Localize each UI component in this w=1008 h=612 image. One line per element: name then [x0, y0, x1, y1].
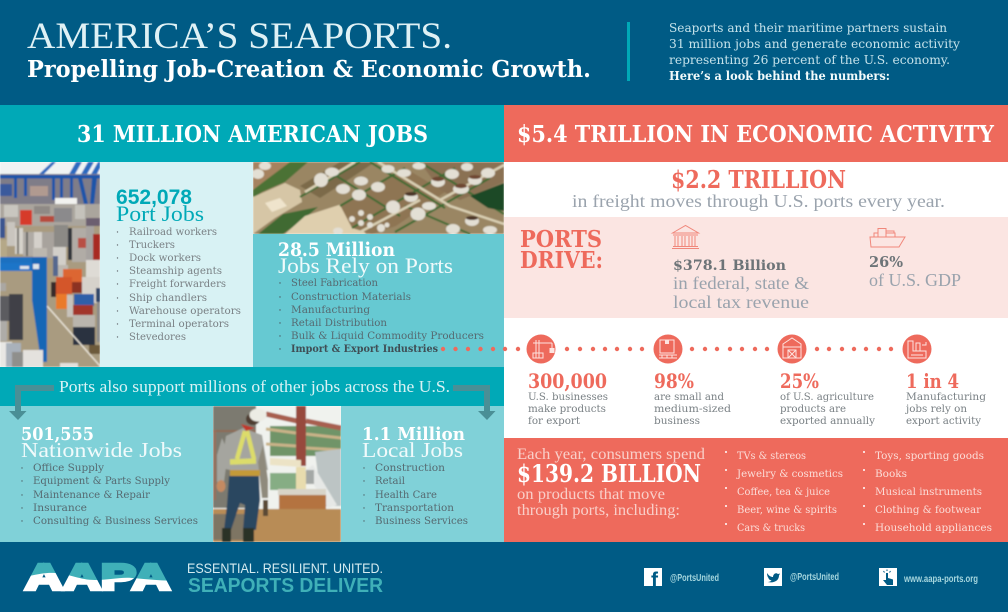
- stat: agriculture: [780, 369, 875, 427]
- list: products column two: [863, 450, 992, 534]
- spending text: [517, 446, 705, 519]
- stat: agriculture: 25%: [780, 369, 819, 393]
- list: port jobs: Ship chandlers: [129, 292, 207, 304]
- list: products column one: TVs & stereos: [737, 450, 806, 462]
- stat: businesses: [528, 369, 608, 427]
- spending text: Each year, consumers spend: [517, 446, 705, 463]
- list: industries: Retail Distribution: [291, 317, 387, 329]
- list: industries: Bulk & Liquid Commodity Producers: [291, 330, 484, 342]
- list: port jobs: Warehouse operators: [129, 305, 241, 317]
- list: products column one: Coffee, tea & juice: [737, 486, 830, 498]
- stat: tax revenue: in federal, state &: [673, 273, 809, 293]
- freight stat: $2.2 TRILLION: [671, 165, 846, 194]
- list: industries: Construction Materials: [291, 291, 411, 303]
- stat: manufacturing: Manufacturing: [906, 391, 986, 403]
- list: nationwide jobs: Office Supply: [33, 462, 104, 474]
- photo: construction worker: [213, 406, 341, 542]
- stat: small business: are small and: [654, 391, 724, 403]
- list: industries: Manufacturing: [291, 304, 370, 316]
- list: port jobs: Steamship agents: [129, 265, 222, 277]
- stat: small business: [654, 369, 731, 427]
- icon: facebook: [644, 568, 662, 592]
- arrow: left: [9, 385, 54, 420]
- list: products column one: Cars & trucks: [737, 522, 805, 534]
- list: port jobs: Terminal operators: [129, 318, 229, 330]
- tagline: ESSENTIAL. RESILIENT. UNITED.: [187, 560, 383, 576]
- list: industries: Steel Fabrication: [291, 277, 378, 289]
- heading: port jobs: Port Jobs: [116, 201, 204, 226]
- list: products column one: Beer, wine & spirits: [737, 504, 837, 516]
- list: products column two: Toys, sporting goods: [875, 450, 984, 462]
- panel: ports drive: [504, 217, 1008, 318]
- stat: businesses: for export: [528, 415, 581, 427]
- icon: facebook: f: [651, 569, 659, 592]
- list: local jobs: Health Care: [375, 489, 437, 501]
- panel: consumer spending: [504, 438, 1008, 542]
- heading: local jobs: Local Jobs: [362, 438, 463, 462]
- intro text: [669, 21, 960, 83]
- facebook handle: @PortsUnited: [670, 573, 719, 584]
- stat: small business: 98%: [654, 369, 694, 393]
- list: products column one: Jewelry & cosmetics: [736, 468, 843, 480]
- list: local jobs: Retail: [375, 475, 406, 487]
- tagline: [187, 560, 384, 597]
- icon: barn: [778, 334, 806, 364]
- section heading: economic activity: [504, 105, 1008, 162]
- photo: aerial view of storage tanks: [252, 162, 504, 234]
- list: port jobs: Railroad workers: [129, 226, 217, 238]
- tagline: SEAPORTS DELIVER: [188, 575, 384, 597]
- logo: AAPA: AAPA: [25, 556, 170, 598]
- title: AMERICA’S SEAPORTS.: [27, 16, 452, 57]
- list: products column two: Clothing & footwear: [875, 504, 982, 516]
- list: local jobs: [363, 462, 468, 527]
- spending text: through ports, including:: [517, 502, 680, 519]
- panel: port jobs: [100, 162, 253, 367]
- website: www.aapa-ports.org: [903, 574, 978, 585]
- heading: ports drive: PORTS: [520, 226, 602, 253]
- stat: 652,078: 652,078: [116, 186, 192, 209]
- stat: agriculture: of U.S. agriculture: [780, 391, 874, 403]
- stat: agriculture: exported annually: [780, 415, 875, 427]
- list: port jobs: [117, 226, 241, 343]
- list: products column two: Books: [875, 468, 907, 480]
- stat: GDP: [869, 253, 961, 290]
- icon: cargo ship: [870, 228, 905, 247]
- dotted connector: [441, 347, 893, 351]
- list: local jobs: Construction: [375, 462, 445, 474]
- freight stat: in freight moves through U.S. ports every year.: [572, 191, 945, 211]
- icon: twitter: [764, 568, 782, 586]
- icon: crane: [526, 334, 556, 364]
- list: nationwide jobs: Maintenance & Repair: [33, 489, 151, 501]
- icon: click hand: [879, 568, 897, 586]
- list: local jobs: Business Services: [375, 515, 468, 527]
- spending text: $139.2 BILLION: [517, 459, 701, 488]
- band: other jobs: Ports also support millions of other jobs across the U.S.: [59, 377, 450, 396]
- stat: businesses: U.S. businesses: [528, 391, 608, 403]
- stat: manufacturing: export activity: [906, 415, 981, 427]
- photo: container port: [0, 162, 100, 367]
- panel: local jobs: [341, 406, 504, 542]
- header divider: [627, 22, 630, 81]
- intro text: 31 million jobs and generate economic activity: [669, 37, 960, 51]
- twitter handle: @PortsUnited: [790, 572, 839, 583]
- stat: manufacturing: 1 in 4: [906, 369, 959, 393]
- stat: manufacturing: jobs rely on: [904, 403, 967, 415]
- freight stat: [572, 165, 945, 211]
- list: industries: Import & Export Industries: [291, 343, 438, 355]
- stat: GDP: 26%: [869, 253, 903, 271]
- heading: jobs rely on ports: Jobs Rely on Ports: [278, 253, 453, 278]
- stat: tax revenue: local tax revenue: [673, 292, 809, 312]
- list: nationwide jobs: Equipment & Parts Supply: [33, 475, 170, 487]
- list: port jobs: Dock workers: [129, 252, 201, 264]
- panel: nationwide jobs: [0, 406, 213, 542]
- list: port jobs: Stevedores: [129, 331, 186, 343]
- intro text: Seaports and their maritime partners sustain: [669, 21, 947, 35]
- heading: ports drive: [520, 226, 603, 274]
- list: local jobs: Transportation: [375, 502, 454, 514]
- section heading: jobs: 31 MILLION AMERICAN JOBS: [77, 121, 428, 148]
- arrow: right: [453, 385, 496, 420]
- stat: businesses: 300,000: [528, 369, 607, 393]
- panel: jobs relying on ports: [253, 234, 504, 367]
- band: other jobs: [0, 367, 504, 406]
- section heading: jobs: [0, 105, 504, 162]
- list: nationwide jobs: [21, 462, 198, 527]
- list: port jobs: Freight forwarders: [129, 278, 226, 290]
- list: port jobs: Truckers: [129, 239, 175, 251]
- spending text: on products that move: [517, 486, 665, 503]
- stat: small business: medium-sized: [654, 403, 731, 415]
- subtitle: Propelling Job-Creation & Economic Growth.: [27, 56, 591, 83]
- list: nationwide jobs: Insurance: [33, 502, 87, 514]
- stat: agriculture: products are: [780, 403, 846, 415]
- list: products column two: Household appliances: [875, 522, 992, 534]
- icon: government building: [672, 226, 699, 248]
- icon: pallet with box: [654, 334, 682, 364]
- stat: 28.5 million: 28.5 Million: [278, 239, 395, 261]
- heading: ports drive: DRIVE:: [520, 247, 603, 274]
- icon: factory: [902, 334, 932, 364]
- stat: GDP: of U.S. GDP: [869, 270, 961, 290]
- header band: [0, 0, 1008, 105]
- stat: tax revenue: $378.1 Billion: [673, 258, 786, 274]
- list: nationwide jobs: Consulting & Business Services: [33, 515, 198, 527]
- list: products column two: Musical instruments: [875, 486, 982, 498]
- stat: tax revenue: [673, 258, 809, 312]
- list: industries: [279, 277, 484, 355]
- stat: 1.1 million: 1.1 Million: [362, 424, 465, 445]
- stat: businesses: make products: [528, 403, 606, 415]
- stat: 501,555: 501,555: [21, 424, 94, 445]
- heading: nationwide jobs: Nationwide Jobs: [21, 438, 182, 462]
- intro text: Here’s a look behind the numbers:: [669, 69, 890, 83]
- footer: [0, 542, 1008, 612]
- list: products column one: [725, 450, 843, 534]
- stat: manufacturing: [904, 369, 986, 427]
- intro text: representing 26 percent of the U.S. economy.: [669, 53, 950, 67]
- stat: small business: business: [654, 415, 700, 427]
